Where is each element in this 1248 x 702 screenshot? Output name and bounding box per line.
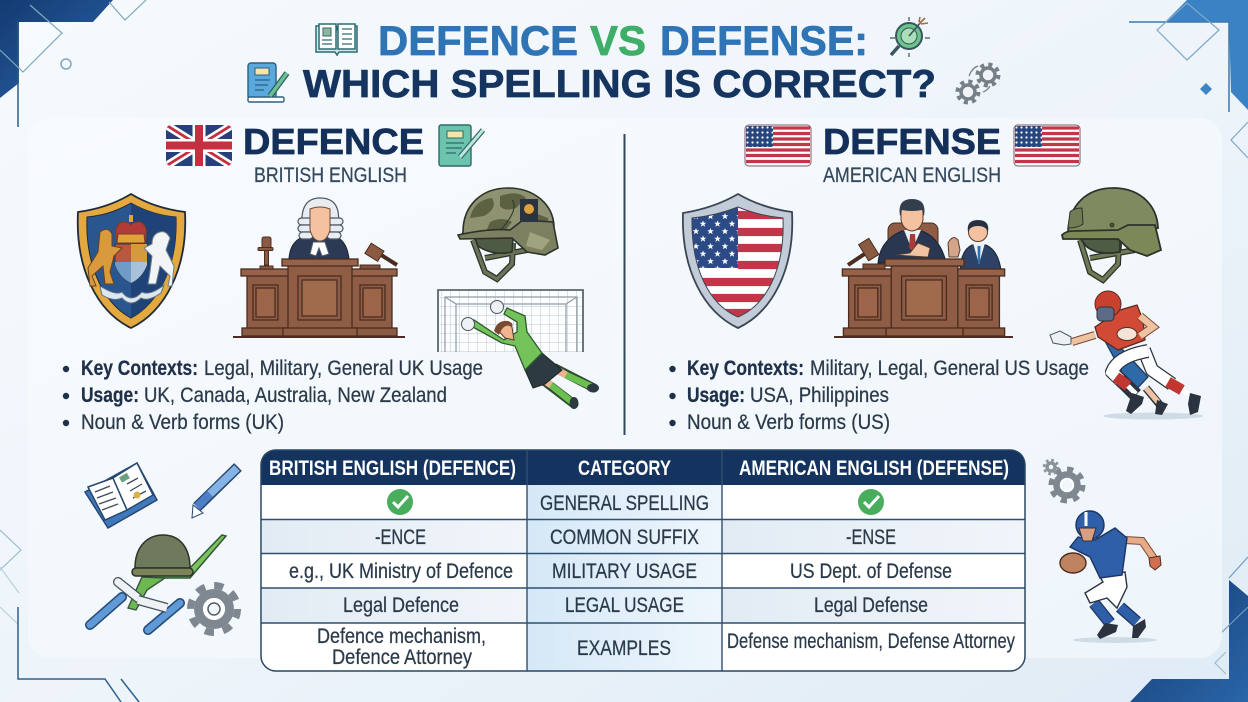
helmet rim bbox=[132, 568, 193, 576]
glove bbox=[1050, 331, 1071, 345]
white glove bbox=[118, 582, 138, 598]
illustration: red football player bbox=[1050, 291, 1203, 420]
icon: US flag left bbox=[745, 125, 811, 166]
goalkeeper shorts bbox=[525, 353, 562, 388]
helmet badge bbox=[520, 199, 538, 222]
boots bbox=[1097, 619, 1146, 639]
heading: Defence: DEFENCE bbox=[243, 121, 424, 162]
white glove fill bbox=[118, 582, 138, 598]
green body bbox=[128, 577, 165, 610]
icon: check British bbox=[387, 489, 413, 515]
row 4 category: LEGAL USAGE bbox=[565, 594, 684, 617]
row 5 British line 2: Defence Attorney bbox=[332, 646, 472, 669]
usage label: Usage: bbox=[81, 384, 139, 407]
advisor hair bbox=[968, 220, 988, 232]
standing advisor bbox=[960, 245, 1001, 270]
face bbox=[1079, 528, 1096, 541]
subheading: American English: AMERICAN ENGLISH bbox=[823, 164, 1001, 187]
rear leg skin bbox=[1146, 388, 1160, 405]
row 5 British line 1: Defence mechanism, bbox=[317, 625, 486, 648]
helmet straps inner bbox=[1080, 240, 1135, 280]
helmet bbox=[1095, 291, 1121, 317]
back leg fill bbox=[1144, 350, 1172, 384]
helmet dome bbox=[462, 188, 554, 236]
icon: UK flag bbox=[166, 125, 232, 166]
judge face bbox=[310, 207, 330, 241]
goalkeeper knees bbox=[545, 371, 566, 385]
helmet bbox=[1076, 511, 1104, 539]
right arm bbox=[1125, 540, 1155, 560]
bullet dots bbox=[669, 366, 676, 426]
header: American: AMERICAN ENGLISH (DEFENSE) bbox=[739, 457, 1009, 480]
decoration: top-right corner bbox=[1129, 0, 1248, 158]
key contexts text: Legal, Military, General UK Usage bbox=[204, 357, 483, 380]
microphone bbox=[258, 237, 273, 269]
front sock bbox=[1116, 377, 1128, 386]
illustration: book, pen, helmet and gear bbox=[85, 463, 238, 632]
row 1 category: GENERAL SPELLING bbox=[540, 492, 709, 515]
goalkeeper head bbox=[496, 324, 514, 340]
pen-leg one fill bbox=[90, 597, 122, 625]
jersey bbox=[1070, 528, 1127, 578]
front sock white bbox=[1128, 386, 1136, 394]
panel: American side bbox=[669, 121, 1203, 434]
helmet straps bbox=[473, 240, 527, 279]
row 2 category: COMMON SUFFIX bbox=[550, 526, 699, 549]
white leg bbox=[138, 600, 167, 608]
helmet stripe bbox=[1084, 512, 1088, 526]
goalkeeper legs bbox=[540, 368, 594, 404]
pen-leg one bbox=[90, 597, 122, 625]
row 3 British: e.g., UK Ministry of Defence bbox=[289, 560, 513, 583]
bench bbox=[834, 259, 1013, 337]
right arm bbox=[1140, 316, 1153, 336]
decoration: bottom-left corner bbox=[0, 530, 139, 702]
ribbon bbox=[100, 285, 164, 303]
pen-leg two bbox=[148, 603, 180, 630]
football bbox=[1060, 553, 1086, 573]
lion bbox=[88, 229, 122, 286]
row 3 category: MILITARY USAGE bbox=[552, 560, 697, 583]
goalkeeper gloves bbox=[462, 300, 504, 330]
row 5 American: Defense mechanism, Defense Attorney bbox=[727, 630, 1015, 653]
table header bbox=[261, 450, 1025, 485]
row 3 American: US Dept. of Defense bbox=[790, 560, 952, 583]
row 4 American: Legal Defense bbox=[814, 594, 928, 617]
gavel bbox=[360, 243, 397, 269]
camouflage bbox=[470, 193, 548, 232]
lawyer head bbox=[901, 209, 923, 231]
back sock white bbox=[1182, 390, 1190, 395]
chair bbox=[888, 223, 938, 259]
illustration: goalkeeper in net bbox=[438, 290, 599, 409]
blue shorts bbox=[1106, 343, 1148, 393]
usage text: USA, Philippines bbox=[750, 384, 889, 407]
bench bbox=[233, 259, 405, 337]
row 4 British: Legal Defence bbox=[343, 594, 459, 617]
right arm fill bbox=[1140, 316, 1153, 336]
heading: Defense: DEFENSE bbox=[823, 121, 1001, 162]
icon: gears right of table bbox=[1044, 460, 1083, 501]
icon: check American bbox=[858, 489, 884, 515]
key contexts label: Key Contexts: bbox=[687, 357, 804, 380]
open book bbox=[85, 463, 157, 528]
helmet bolt bbox=[1110, 223, 1114, 227]
boots bbox=[1126, 393, 1201, 415]
crown bbox=[116, 222, 146, 243]
football bbox=[1117, 328, 1137, 340]
icon: plain helmet bbox=[1062, 188, 1161, 280]
title word: Defence: DEFENCE bbox=[378, 17, 578, 64]
forms text: Noun & Verb forms (UK) bbox=[81, 411, 284, 434]
icon: American shield bbox=[683, 194, 792, 328]
key contexts label: Key Contexts: bbox=[81, 357, 198, 380]
socks fill bbox=[1094, 603, 1137, 623]
subheading: British English: BRITISH ENGLISH bbox=[254, 164, 407, 187]
list: British facts bbox=[63, 357, 483, 434]
alternate row right bbox=[722, 519, 1024, 553]
pen-leg two fill bbox=[148, 603, 180, 630]
illustration: American lawyers at bench bbox=[834, 199, 1013, 337]
helmet dome bbox=[135, 535, 190, 568]
back leg bbox=[1144, 350, 1172, 384]
icon: camouflage helmet bbox=[458, 188, 558, 279]
lawyer hands bbox=[896, 243, 930, 257]
icon: target magnifier bbox=[890, 17, 930, 57]
divider bbox=[624, 134, 626, 435]
alternate row left bbox=[262, 519, 527, 553]
title word: Defense: DEFENSE: bbox=[660, 17, 868, 64]
face mask bbox=[1097, 307, 1114, 321]
goal net bbox=[440, 291, 583, 352]
title line two: WHICH SPELLING IS CORRECT? bbox=[303, 63, 936, 106]
illustration: judge at bench bbox=[233, 198, 405, 337]
icon: open book bbox=[316, 24, 357, 55]
usage label: Usage: bbox=[687, 384, 745, 407]
green arm bbox=[150, 535, 226, 578]
panel: main card bbox=[28, 118, 1222, 658]
category column bbox=[527, 485, 722, 671]
raised hand bbox=[948, 238, 960, 257]
jersey bbox=[1095, 305, 1145, 350]
row 2 American: -ENSE bbox=[846, 526, 896, 549]
shadow bbox=[1103, 412, 1203, 420]
goalkeeper torso and arms bbox=[471, 308, 542, 370]
arms shield bbox=[115, 244, 147, 283]
rear leg fill bbox=[1146, 388, 1158, 402]
table body bbox=[261, 450, 1025, 671]
icon: gears in title bbox=[958, 65, 998, 102]
unicorn bbox=[144, 232, 174, 286]
white leg fill bbox=[138, 600, 167, 608]
main lawyer bbox=[878, 231, 946, 263]
left arm fill bbox=[1072, 335, 1095, 342]
icon: royal shield bbox=[78, 194, 185, 328]
table rules bbox=[261, 450, 1025, 671]
gear bbox=[190, 586, 238, 632]
helmet dome bbox=[1066, 188, 1158, 236]
row 5 category: EXAMPLES bbox=[577, 637, 671, 660]
front leg fill bbox=[1112, 351, 1148, 380]
panel: British side bbox=[63, 121, 599, 434]
advisor head bbox=[968, 222, 988, 242]
alternate row right lower bbox=[722, 588, 1024, 623]
socks bbox=[1094, 603, 1137, 623]
helmet side plate bbox=[1068, 208, 1083, 228]
helmet straps bbox=[1080, 240, 1135, 280]
shadow bbox=[1073, 637, 1157, 643]
pen bbox=[192, 467, 238, 518]
decoration: top-left corner bbox=[0, 0, 146, 127]
left arm bbox=[1072, 335, 1095, 342]
header: Category: CATEGORY bbox=[578, 457, 671, 480]
bullet dots bbox=[63, 366, 69, 426]
helmet inner bbox=[1080, 238, 1120, 253]
table border bbox=[261, 450, 1025, 671]
hand bbox=[1149, 556, 1161, 570]
alternate row left lower bbox=[262, 588, 527, 623]
icon: US flag right bbox=[1014, 125, 1080, 166]
table: spelling comparison bbox=[261, 450, 1025, 671]
back sock bbox=[1168, 382, 1182, 390]
icon: notebook and pen in title bbox=[248, 63, 287, 102]
row 2 British: -ENCE bbox=[375, 526, 426, 549]
right arm fill bbox=[1125, 540, 1155, 560]
key contexts text: Military, Legal, General US Usage bbox=[810, 357, 1089, 380]
judge wig bbox=[298, 198, 343, 239]
forms text: Noun & Verb forms (US) bbox=[687, 411, 890, 434]
list: American facts bbox=[669, 357, 1089, 434]
title bbox=[303, 17, 936, 106]
helmet inner bbox=[475, 238, 513, 253]
helmet straps inner bbox=[473, 240, 527, 279]
illustration: blue football player bbox=[1060, 511, 1161, 643]
icon: green notebook bbox=[439, 125, 483, 166]
title word: vs: VS bbox=[590, 17, 646, 64]
goalkeeper boots bbox=[570, 384, 599, 409]
helmet brim bbox=[458, 220, 558, 255]
usage text: UK, Canada, Australia, New Zealand bbox=[144, 384, 447, 407]
header: British: BRITISH ENGLISH (DEFENCE) bbox=[269, 457, 516, 480]
gavel bbox=[848, 238, 885, 269]
judge robe bbox=[289, 236, 349, 259]
pants bbox=[1085, 572, 1127, 608]
judge collar bbox=[310, 242, 329, 256]
helmet brim bbox=[1062, 225, 1161, 256]
front leg bbox=[1112, 351, 1148, 395]
decoration: bottom-right corner bbox=[1130, 557, 1248, 702]
